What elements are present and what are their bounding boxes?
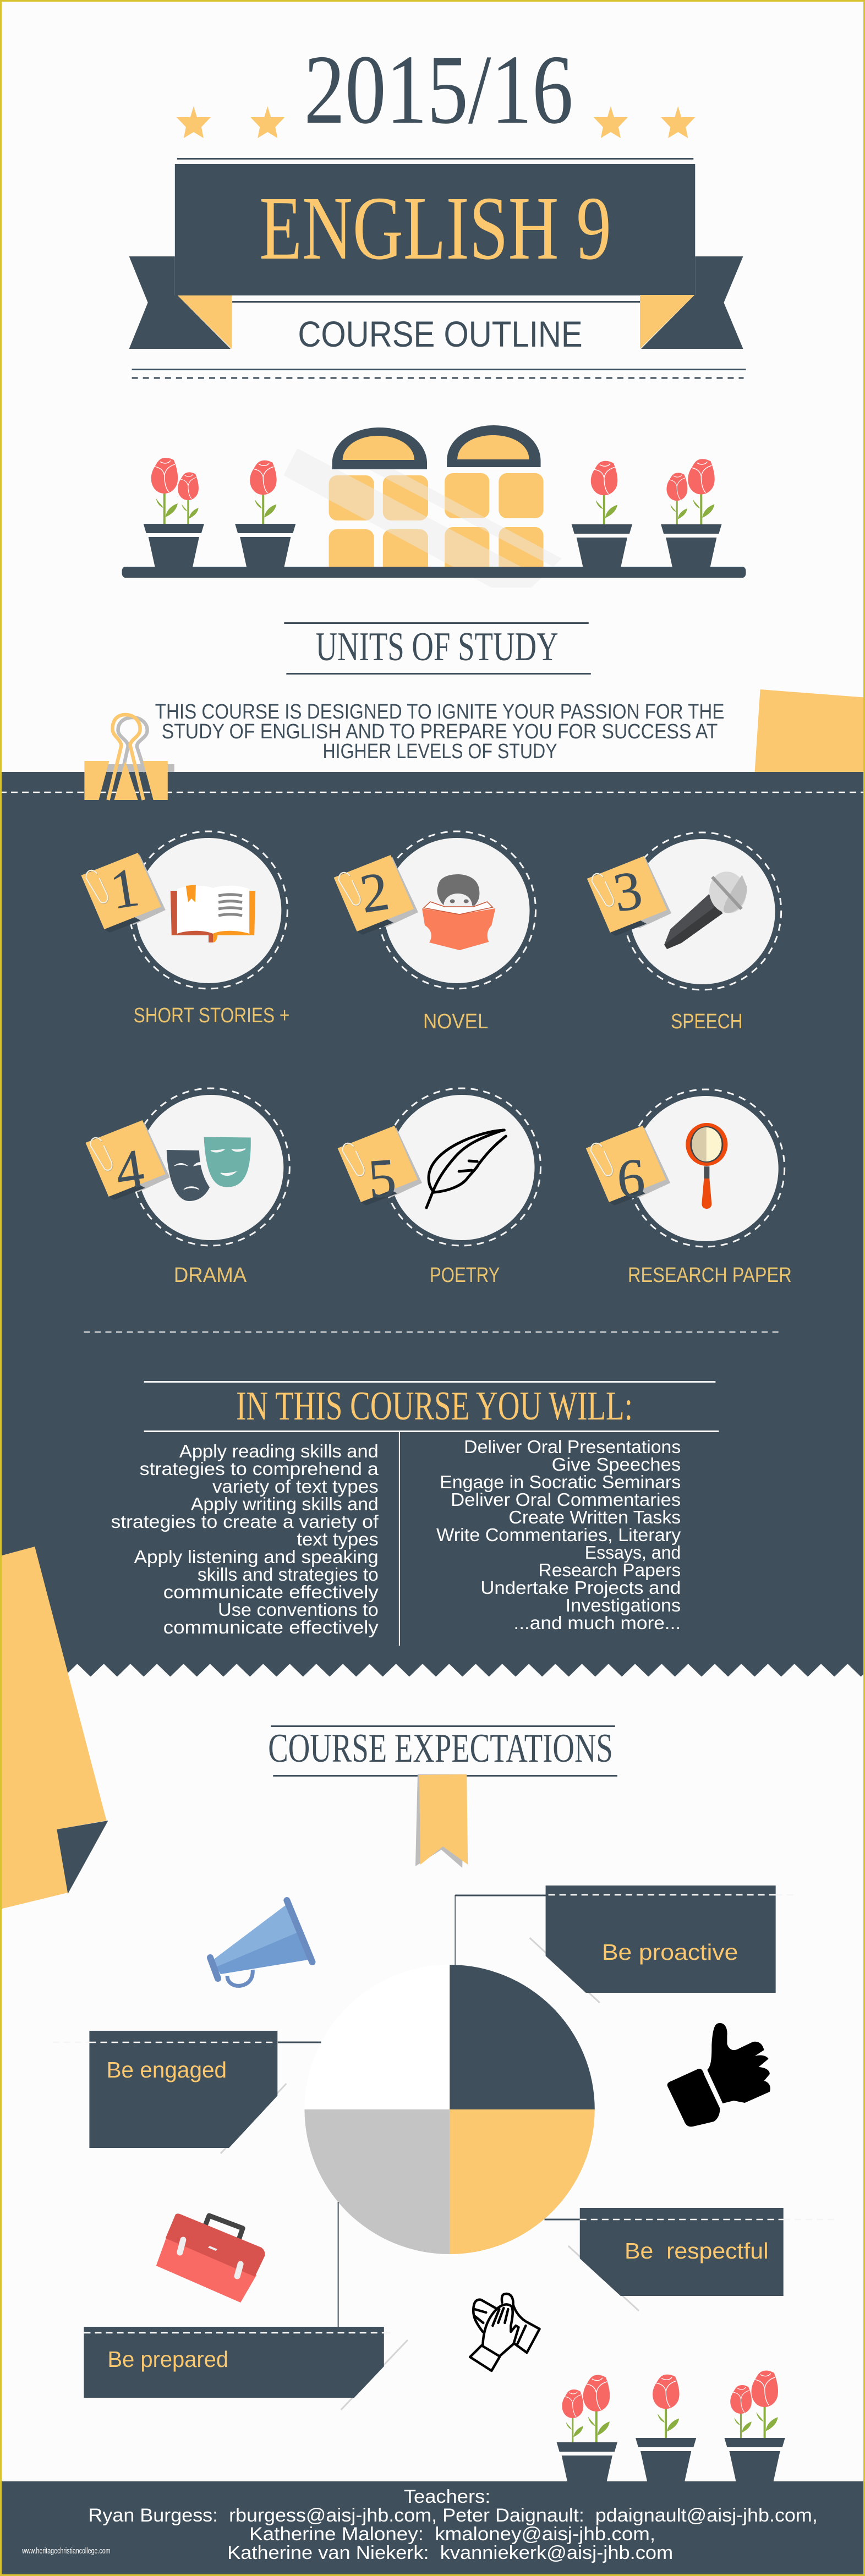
note with number 3 <box>587 856 671 936</box>
right column skills: Give Speeches <box>552 1455 681 1475</box>
note with number 4: 4 <box>111 1137 148 1202</box>
panel: bottom flower pots <box>557 2371 785 2486</box>
left column skills: skills and strategies to <box>198 1565 379 1585</box>
left column skills: Apply writing skills and <box>191 1494 379 1515</box>
heading: course expectations <box>268 1725 617 1777</box>
shelf <box>122 567 746 578</box>
heading: IN THIS COURSE YOU WILL: <box>236 1384 633 1429</box>
title: year: 2015/16 <box>304 34 573 144</box>
note with number 6 <box>586 1126 670 1210</box>
unit 3: speech <box>587 832 781 1033</box>
intro paragraph: THIS COURSE IS DESIGNED TO IGNITE YOUR PASSION FOR THE <box>155 700 724 724</box>
window panes <box>329 473 544 574</box>
icon: quill <box>426 1130 506 1208</box>
icon: open book <box>171 885 255 942</box>
panel: in this course you will <box>111 1381 719 1646</box>
subtitle: COURSE OUTLINE <box>298 314 583 355</box>
label: NOVEL <box>423 1010 488 1033</box>
callout: be prepared <box>84 2202 408 2410</box>
right column skills: Deliver Oral Presentations <box>464 1437 681 1457</box>
icon: theatre masks <box>167 1137 251 1201</box>
left column skills: variety of text types <box>212 1477 379 1497</box>
left column skills: strategies to comprehend a <box>140 1459 379 1479</box>
watermark: www.heritagechristiancollege.com <box>21 2546 111 2556</box>
left column skills: Apply reading skills and <box>179 1442 379 1462</box>
right column skills: Deliver Oral Commentaries <box>451 1490 681 1510</box>
left column skills: communicate effectively <box>163 1582 379 1603</box>
panel: header <box>129 34 746 378</box>
left column skills: strategies to create a variety of <box>111 1512 379 1532</box>
pie chart <box>304 1965 595 2254</box>
heading: units of study: UNITS OF STUDY <box>315 624 559 670</box>
callout: be engaged: Be engaged <box>107 2057 227 2082</box>
note with number 4 <box>85 1120 170 1202</box>
right column skills: Investigations <box>566 1596 681 1616</box>
panel: footer teachers: Katherine van Niekerk: kvanniekerk@aisj-jhb.com <box>227 2542 673 2563</box>
label: SHORT STORIES + <box>134 1004 289 1027</box>
label: RESEARCH PAPER <box>628 1264 792 1287</box>
panel: footer teachers: Katherine Maloney: kmaloney@aisj-jhb.com, <box>249 2524 655 2545</box>
note with number 5: 5 <box>366 1147 398 1210</box>
callout: be prepared: Be prepared <box>108 2347 228 2372</box>
note with number 5 <box>338 1126 422 1210</box>
right column skills: Research Papers <box>539 1560 681 1581</box>
right column skills <box>436 1437 681 1634</box>
heading: course expectations: COURSE EXPECTATIONS <box>268 1726 613 1771</box>
bookmark ribbon <box>415 1774 468 1868</box>
tulips <box>151 458 715 524</box>
note with number 1: 1 <box>106 856 143 921</box>
note with number 1 <box>81 853 166 933</box>
label: DRAMA <box>174 1264 247 1287</box>
left column skills <box>111 1442 379 1638</box>
icon: microphone <box>664 868 750 949</box>
right column skills: Create Written Tasks <box>508 1508 681 1528</box>
unit 4: drama <box>85 1088 289 1287</box>
callout: be respectful <box>545 2208 839 2311</box>
label: SPEECH <box>671 1010 742 1033</box>
right column skills: Engage in Socratic Seminars <box>440 1472 681 1493</box>
panel: window and flower shelf <box>122 425 746 588</box>
label: POETRY <box>430 1264 500 1287</box>
callout: be respectful: Be respectful <box>625 2238 769 2263</box>
intro paragraph: HIGHER LEVELS OF STUDY <box>323 740 557 763</box>
unit 2: novel <box>334 831 536 1033</box>
window <box>283 425 562 588</box>
callout: be proactive: Be proactive <box>602 1939 738 1965</box>
panel: footer teachers: Ryan Burgess: rburgess@aisj-jhb.com, Peter Daignault: pdaignault@aisj-jhb.com, <box>88 2505 818 2526</box>
right column skills: Essays, and <box>585 1543 681 1563</box>
icon: megaphone <box>210 1900 312 1986</box>
unit 5: poetry <box>338 1088 541 1287</box>
icon: magnifying glass <box>686 1123 727 1209</box>
flower pots <box>144 524 721 568</box>
left column skills: Apply listening and speaking <box>134 1547 379 1567</box>
note with number 2 <box>334 855 418 935</box>
right column skills: Undertake Projects and <box>480 1578 681 1598</box>
window glare <box>283 447 562 588</box>
icon: briefcase <box>156 2213 265 2303</box>
icon: binder clip <box>84 715 174 800</box>
right column skills: Write Commentaries, Literary <box>436 1525 681 1545</box>
panel: footer teachers <box>0 2481 865 2576</box>
unit 1: short stories <box>81 831 289 1027</box>
callout: be proactive <box>455 1886 797 2003</box>
intro paragraph <box>155 700 724 763</box>
panel: dark units section <box>0 772 865 1676</box>
window arches <box>332 425 541 469</box>
zigzag torn edge <box>0 1664 865 1678</box>
panel: footer teachers: Teachers: <box>404 2486 490 2507</box>
right column skills: ...and much more... <box>513 1613 681 1634</box>
sticky note corner top right <box>755 689 865 772</box>
course name: ENGLISH 9 <box>259 178 611 278</box>
icon: thumbs up <box>667 2023 770 2126</box>
note with number 3: 3 <box>609 859 646 924</box>
unit 6: research paper <box>586 1089 792 1287</box>
sticky note left with fold <box>0 1547 108 1909</box>
ribbon banner <box>129 164 743 349</box>
heading: units of study <box>284 622 591 675</box>
icon: person reading <box>422 874 495 950</box>
icon: clapping hands <box>470 2294 540 2371</box>
left column skills: Use conventions to <box>218 1600 379 1620</box>
icon: stars <box>177 106 695 138</box>
intro paragraph: STUDY OF ENGLISH AND TO PREPARE YOU FOR SUCCESS AT <box>162 720 718 743</box>
note with number 6: 6 <box>615 1147 647 1210</box>
left column skills: communicate effectively <box>163 1618 379 1638</box>
callout: be engaged <box>52 2031 321 2153</box>
note with number 2: 2 <box>356 860 393 925</box>
left column skills: text types <box>297 1530 379 1550</box>
